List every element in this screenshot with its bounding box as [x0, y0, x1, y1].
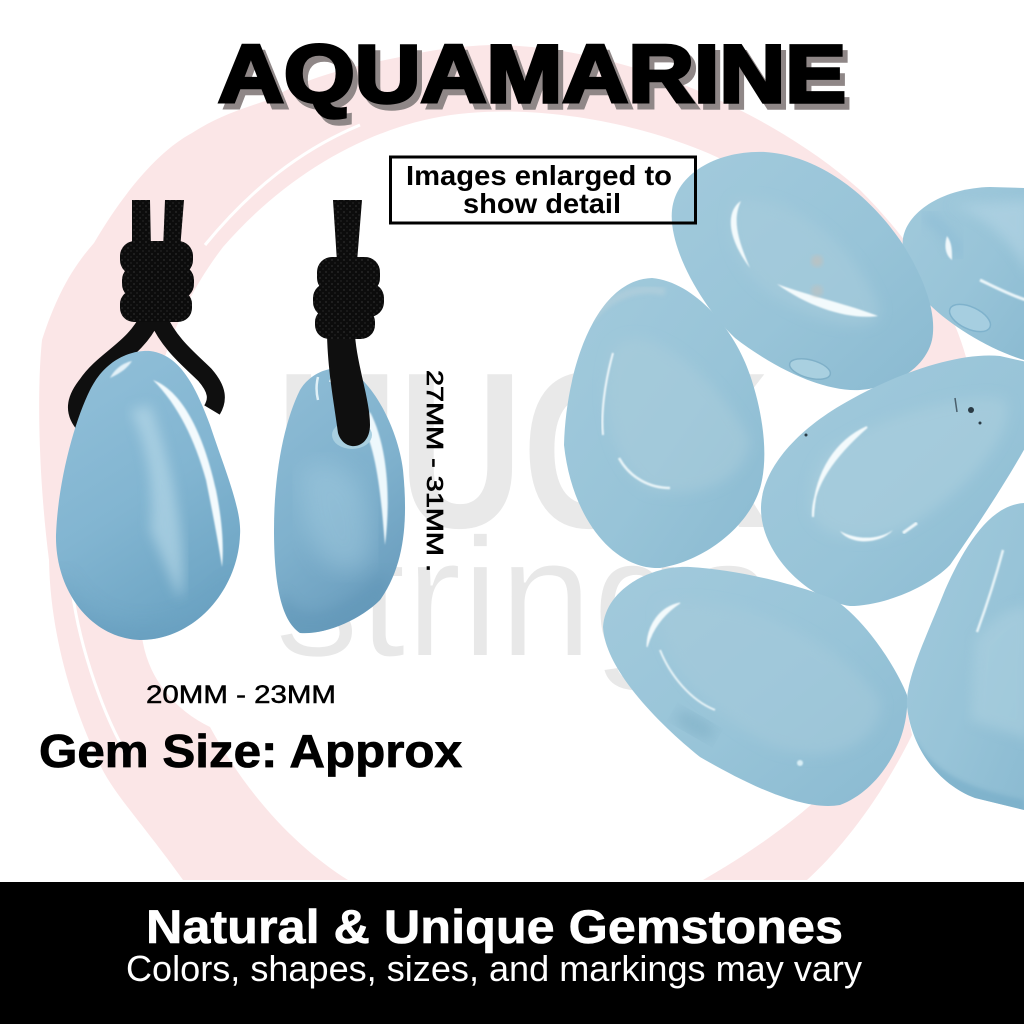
knot — [120, 241, 194, 322]
stone: left — [564, 278, 764, 568]
title: AQUAMARINE — [218, 29, 846, 120]
callout: images enlarged: Images enlarged to — [406, 160, 672, 191]
stone: centre right — [761, 355, 1024, 606]
cord ends — [132, 200, 184, 250]
footer subtext: Colors, shapes, sizes, and markings may vary — [126, 948, 862, 989]
stone — [274, 368, 405, 633]
stone: bottom right — [900, 500, 1024, 820]
pendant 2: side view with cord — [274, 200, 405, 640]
watermark logo: HUCK — [275, 327, 770, 575]
width label: 20MM - 23MM — [146, 681, 336, 709]
stone: top centre — [672, 152, 933, 390]
pink brush ring — [39, 45, 975, 880]
height label: 27MM - 31MM . — [422, 370, 448, 572]
title: AQUAMARINE — [223, 35, 851, 126]
stone: bottom — [603, 567, 907, 806]
knot — [313, 257, 384, 339]
pendant 1: front view with cord — [50, 200, 240, 660]
cord — [333, 200, 362, 262]
watermark logo: strings — [275, 503, 770, 693]
stone — [56, 351, 240, 640]
callout: images enlarged: show detail — [463, 188, 621, 219]
callout: images enlarged — [390, 157, 696, 223]
gem size heading: Gem Size: Approx — [39, 725, 462, 777]
loose gemstones photo — [564, 152, 1024, 820]
footer heading: Natural & Unique Gemstones — [146, 900, 843, 953]
watermark logo — [275, 327, 770, 693]
stone: top right — [902, 187, 1024, 360]
footer band — [0, 882, 1024, 1024]
